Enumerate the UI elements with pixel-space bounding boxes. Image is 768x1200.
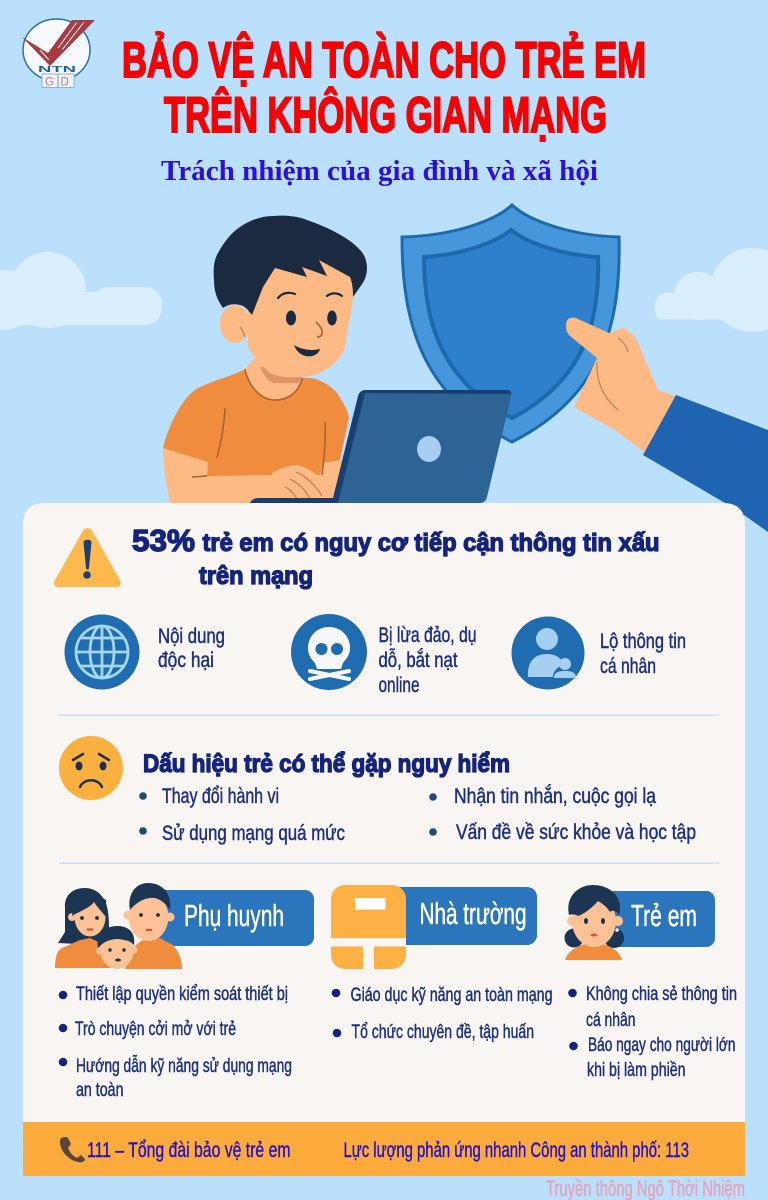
icon: globe xyxy=(64,614,140,690)
list: warning signs: Nhận tin nhắn, cuộc gọi lạ xyxy=(454,783,656,808)
text: harmful content: độc hại xyxy=(158,648,214,672)
list: parents: an toàn xyxy=(76,1079,124,1101)
list: warning signs: Vấn đề về sức khỏe và học tập xyxy=(456,820,696,844)
illustration: laptop xyxy=(250,390,511,503)
text: personal information leak xyxy=(600,629,686,678)
illustration: boy xyxy=(163,216,367,503)
text: harmful content: Nội dung xyxy=(158,624,225,648)
button: parents: Phụ huynh xyxy=(184,899,284,933)
icon: personal information xyxy=(512,616,584,690)
title xyxy=(122,32,646,143)
button: parents xyxy=(150,890,314,946)
text: personal information leak: cá nhân xyxy=(600,654,656,678)
logo: D xyxy=(60,76,69,88)
text: scams and bullying: dỗ, bắt nạt xyxy=(378,647,458,672)
list: parents: Hướng dẫn kỹ năng sử dụng mạng xyxy=(76,1054,292,1077)
text: hotline 111: 111 – Tổng đài bảo vệ trẻ em xyxy=(87,1139,290,1162)
icon: sad face xyxy=(59,736,123,800)
cloud left xyxy=(0,252,162,330)
list: warning signs xyxy=(139,783,696,845)
icon: phone xyxy=(60,1137,85,1162)
text: harmful content xyxy=(158,624,225,672)
icon: family xyxy=(55,883,182,969)
text: personal information leak: Lộ thông tin xyxy=(600,629,686,653)
heading: 53 percent xyxy=(132,523,660,590)
panel xyxy=(23,503,745,1176)
list: parents xyxy=(59,983,292,1101)
heading: 53 percent: trên mạng xyxy=(199,562,313,590)
button: school: Nhà trường xyxy=(420,897,526,931)
heading: warning signs: Dấu hiệu trẻ có thể gặp nguy hiểm xyxy=(143,750,510,778)
heading: 53 percent: 53% xyxy=(132,523,195,558)
icon: girl xyxy=(564,885,624,960)
icon: school xyxy=(331,885,406,969)
list: children: cá nhân xyxy=(586,1009,636,1031)
list: school xyxy=(332,984,552,1043)
text: scams and bullying: online xyxy=(378,673,420,697)
list: parents: Thiết lập quyền kiểm soát thiết bị xyxy=(76,983,288,1005)
illustration: shield xyxy=(402,205,619,442)
logo: G xyxy=(45,76,54,88)
button: children: Trẻ em xyxy=(631,899,697,933)
cloud right xyxy=(654,248,768,332)
subtitle: Trách nhiệm của gia đình và xã hội xyxy=(161,156,598,187)
list: children: khi bị làm phiền xyxy=(587,1059,686,1081)
footer bar xyxy=(23,1122,745,1176)
heading: 53 percent: trẻ em có nguy cơ tiếp cận thông tin xấu xyxy=(202,529,660,557)
list: warning signs: Thay đổi hành vi xyxy=(162,784,279,808)
button: school xyxy=(390,887,537,945)
text: scams and bullying: Bị lừa đảo, dụ xyxy=(378,623,476,647)
button: children xyxy=(605,891,715,947)
list: warning signs: Sử dụng mạng quá mức xyxy=(162,821,345,845)
logo xyxy=(22,19,95,88)
list: school: Tổ chức chuyên đề, tập huấn xyxy=(352,1021,534,1043)
icon: skull xyxy=(291,614,367,690)
icon: warning triangle xyxy=(54,528,121,587)
list: children xyxy=(568,983,737,1081)
logo: NTN xyxy=(38,65,76,74)
illustration: hand and sleeve xyxy=(566,318,768,532)
list: school: Giáo dục kỹ năng an toàn mạng xyxy=(350,984,552,1006)
text: scams and bullying xyxy=(378,623,476,697)
list: parents: Trò chuyện cởi mở với trẻ xyxy=(75,1018,236,1040)
